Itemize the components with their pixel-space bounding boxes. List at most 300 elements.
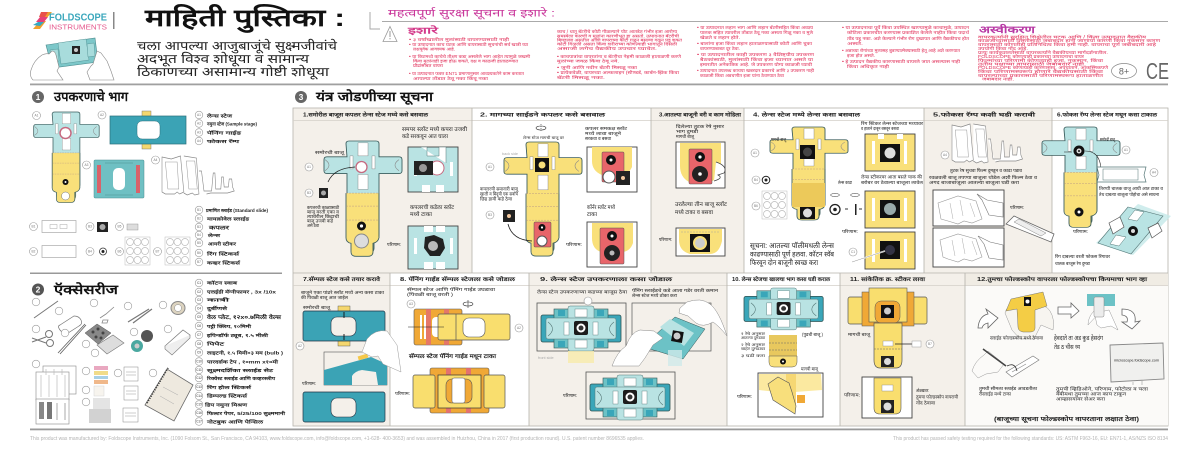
text: share caption: तुमची व्हिडिओने, परिणाम, फोटोला व चला xyxy=(1056,386,1149,392)
legend: accessories: डिप नमुना मिश्रण xyxy=(204,402,248,408)
callout: note on lens cleaning: फिरवून दोन बाजूनी स्वच्छ करा xyxy=(750,258,818,267)
diagram: lens stage cross: B3 xyxy=(307,191,311,195)
panel 4: fit lens in lens stage xyxy=(750,110,924,269)
diagram: fold result box xyxy=(758,373,823,417)
text: front side: समोरची बाजू xyxy=(1100,136,1116,143)
text: warning column 3: खेळते व लहान होते. xyxy=(700,35,740,40)
text: share caption xyxy=(1056,386,1149,402)
legend: accessories: रिक्वेस्ट स्लाईड आणि कव्हरस्लीप xyxy=(206,375,275,381)
diagram: yellow assembled stage xyxy=(848,288,934,368)
legend: accessories: C13 xyxy=(196,385,202,389)
text: corner insert: कॉर्नर स्लॉट मध्ये xyxy=(587,203,616,211)
panel 8: attach panning guide to sample stage: 8. पॅनिंग गाईड सॅम्पल स्टेजला कसे जोडाल xyxy=(400,275,517,283)
diagram: hand folding 1 xyxy=(933,190,1004,226)
text: insert three: उरलेल्या तीन बाजू स्लॉट xyxy=(675,200,727,208)
panel 3: fold the flap xyxy=(659,110,742,256)
diagram: lens box 2 xyxy=(865,191,915,228)
diagram: folded strip xyxy=(769,335,797,367)
diagram: focus ramp fold xyxy=(941,124,1023,163)
logo: Foldscope Instruments xyxy=(33,12,114,32)
diagram: lens stage on device xyxy=(537,297,626,363)
text: open both: (पिवळी बाजू वरती ) xyxy=(407,291,454,298)
text: result note 11: तुमचा फोल्डस्कोप वापराची xyxy=(916,394,959,400)
legend: parts B: रिंग स्टिकर्स xyxy=(205,250,241,256)
legend: accessories: C2 xyxy=(197,290,201,294)
text: ramp note: चालक बाजूस रेष दुमडा xyxy=(1055,260,1091,267)
text: back side 11: मागची बाजू xyxy=(848,331,871,338)
text: top lens note: रिंग स्टिकर लेन्स स्टेजच्या मध्यावर xyxy=(861,120,923,126)
diagram: yellow stage with lens xyxy=(751,127,848,220)
text: sample caption: तुमची सीमला स्लाईड आवडतीला xyxy=(979,385,1038,392)
text: share caption: आम्हाशयावर शेअर करा xyxy=(1056,396,1106,402)
text: phone caption: हेवदाते ता अड कुड हेसदंग xyxy=(1054,334,1103,342)
text: stage right note xyxy=(632,287,719,298)
legend: accessories: C8 xyxy=(197,342,201,346)
panel 1: fix coupler on front of lens stage: 1.समोरील बाजूस कपलर लेन्स स्टेज मध्ये कसे बसवाल xyxy=(303,110,429,118)
badge: 2: 2 xyxy=(36,284,41,294)
text: stage note xyxy=(301,289,385,301)
text: result 7: परिणाम: xyxy=(302,380,316,386)
badge: 3 xyxy=(295,91,307,103)
legend: parts B xyxy=(195,206,268,266)
panel 10: fold the bottom of lens stage xyxy=(732,275,831,417)
text: warning column 2: मुलांच्या जवळ किंवा ठेवू नये. xyxy=(557,58,619,64)
text: ramp insert: तिरप्यी चालक वाजू आधी आत टाका व xyxy=(1099,185,1163,192)
text: result note 11: ओळखावर: xyxy=(916,387,929,393)
text: corner insert: टाका xyxy=(587,212,598,218)
legend: accessories: C7 xyxy=(197,333,201,337)
item: tweezers xyxy=(58,324,86,354)
parts B: slides, coupler and stickers: B2 xyxy=(32,250,36,254)
text: result 8: परिणाम: xyxy=(395,390,410,396)
panel 11: mark with symbol: 11. सांकेतिक क्र. स्टीकर लावा xyxy=(850,275,926,283)
text: disclaimer: तृतीय पक्षाच्या वापरासाठी जबाबदार नाही. xyxy=(978,62,1086,68)
text: warning column 4 xyxy=(842,25,970,70)
panel 12: view the microscopic world with phone: 12.तुमचा फोल्डस्कोप वापरला फोल्डस्कोपचा कियमाचा भाग व्हा xyxy=(977,275,1148,283)
part A4: focus ramp: A4 xyxy=(154,158,158,162)
item: ring and dimple stickers xyxy=(82,366,111,423)
text: ramp insert xyxy=(1099,185,1163,198)
legend: parts A: A2 xyxy=(197,122,201,126)
text: top insert xyxy=(585,126,628,141)
text: warning column 3: • बालांना इजा किंवा लहान हाताळण्यासाठी कोटी आणि चुका xyxy=(697,41,813,47)
text: insert into foldscope: स्लाईड फोल्डस्कोप मध्ये ठेवावा xyxy=(990,334,1044,340)
part A2: sample stage xyxy=(98,111,186,149)
text: warning column 4: • अन्नाच्या रोगांच्या मुलासह बुडण्यात्मेक्यासाठी हेतू आहे अशे करण्यात xyxy=(842,48,961,54)
panel 2: fix coupler from the back xyxy=(480,110,637,267)
legend: accessories: कात्री xyxy=(204,296,231,302)
text: stage note: की पिवळी बाजू आत जाईल xyxy=(301,294,349,301)
panel 9: attach lens stage to device: 9. लेन्स स्टेज उपकरणाला कसा जोडाल xyxy=(540,275,674,283)
diagram: guide being attached: A3 xyxy=(409,302,413,306)
legend: accessories: डिम्पल्ड स्टिकर्स xyxy=(205,392,249,398)
part A3: panning guide xyxy=(82,160,144,198)
text: warning column 2: बिघडल्या असतील आणि वापराच्या कोटी गळून बसल्या गळून पडू शकत xyxy=(557,38,683,44)
diagram: hand phone xyxy=(1087,294,1118,330)
legend: parts B: कपलर xyxy=(208,226,230,232)
diagram: coupler step xyxy=(587,147,637,192)
text: result 6: परिणाम: xyxy=(1073,228,1088,234)
text: fold note: अगद बाजाबाजूला आतल्या बाजूला घडी करा xyxy=(929,179,1020,186)
diagram: hand folding sample stage xyxy=(324,331,401,385)
legend: accessories: कॉटन स्वाब xyxy=(205,280,238,286)
text: insert through: सॅम्पल स्टेज पॅनिंग गाईड मधून टाका xyxy=(408,352,497,360)
legend: accessories: नोटबुक आणि पेन्सिल xyxy=(205,418,264,426)
panel 4: fit lens in lens stage: 4. लेन्स स्टेज मध्ये लेन्स कसा बसवाल xyxy=(753,110,862,118)
text: disclaimer: जबाबदार नाही. xyxy=(982,76,1014,82)
text: disclaimer: फिल्मांच्या परिणामी कोणत्याही इजा, नुकसान, किंवा xyxy=(978,58,1104,64)
legend: accessories: रिंग होल स्टिकर्स xyxy=(205,384,253,390)
text: ramp note: रिंग दाबल्या वरती फोकस रिंगावर xyxy=(1055,253,1110,259)
text: coupler note: बाजू वरती एका व xyxy=(307,208,339,216)
item: scissors xyxy=(32,325,54,346)
legend: parts B: प्रमाणित स्लाईड (Standard slide) xyxy=(205,207,268,213)
legend: accessories: C10 xyxy=(196,360,202,364)
text: phone caption: तेड ठ चीस ध्य xyxy=(1054,343,1080,351)
diagram: stage result xyxy=(586,372,675,420)
text: result 2: परिणाम: xyxy=(566,241,582,247)
legend: accessories: C5 xyxy=(197,315,201,319)
diagram: lens stage cross xyxy=(305,141,402,256)
arrow: curved down xyxy=(1122,309,1140,329)
text: slide in: कडे सरकवून आत घाला xyxy=(402,132,449,140)
panel: safety notices xyxy=(370,6,1169,84)
text: share caption: वेबीमधा तुमच्या आज काय टाकून xyxy=(1056,390,1127,398)
text: fold labels: ३ घडी करा xyxy=(741,353,767,358)
panel 8: attach panning guide to sample stage xyxy=(395,275,523,413)
text: top insert: मध्ये लावा बाजूने xyxy=(585,130,622,137)
heading: accessories: ऍक्सेसरीज xyxy=(53,282,120,297)
text: ramp note xyxy=(1055,253,1110,267)
diagram: guide being attached: A2 xyxy=(517,326,521,330)
diagram: yellow stage with lens: B6 xyxy=(754,204,758,208)
text: sticker note: लेन्स स्टीकरवर आता बसते चाक की xyxy=(861,174,923,180)
text: warning column 2: • काचपात्रांचा वापरतांना व बॅटरीचा नेहमी काळजी हाताळणी करणे xyxy=(557,54,682,59)
part A1: lens stage: A1 xyxy=(35,114,39,118)
logo: Foldscope Instruments: INSTRUMENTS xyxy=(49,22,107,32)
text: slide in: समपर स्लॉट मध्ये कपरा उजवी xyxy=(402,125,468,133)
legend: accessories: C14 xyxy=(196,394,202,398)
text: warning column 3: बैठकांसाठी, मुलांसाठी किंवा इजा ध्यानात असते या xyxy=(700,57,814,63)
item: notebook and pencil xyxy=(145,368,193,421)
legend: accessories: पारदर्शक टेप , १०mm x१०मी xyxy=(206,358,279,364)
text: sample caption: रीस्लाईड मध्ये टाका xyxy=(979,390,1012,396)
parts B: slides, coupler and stickers: B1 xyxy=(32,224,36,228)
text: back note 10: मागची बाजू xyxy=(801,366,819,372)
text: fold along line: भाग दुमडी xyxy=(676,128,699,135)
diagram: yellow cross with coupler: B3 xyxy=(488,213,492,217)
text: result 3: परिणाम: xyxy=(659,236,672,242)
legend: parts A: पॅनिंग गाईड xyxy=(205,130,242,136)
legend: parts A: A3 xyxy=(197,130,201,134)
text: top insert: सरकवा व बसवा xyxy=(585,136,612,141)
text: fold along line: दिलेल्या तुटक रेषे नुसार xyxy=(676,123,724,130)
parts B: slides, coupler and stickers: B4 xyxy=(88,250,92,254)
footer right: This product has passed safety testing required for the following standards: US: ASTM F963-16, EU: EN71-1, AS/NZS ISO 8134 xyxy=(893,436,1168,442)
text: warning column 1: किंवा मुलांनाही इजा होऊ शकते, दक्ष व काळजी हाताळण्यात xyxy=(413,58,519,64)
legend: parts A: A1 xyxy=(197,113,201,117)
text: front note 10: (पुढची बाजू ) xyxy=(802,331,823,338)
heading: parts: उपकरणाचे भाग xyxy=(53,89,129,104)
panel 10: fold the bottom of lens stage: 10. लेन्स स्टेजचा खालचा भाग कसा घडी कराल xyxy=(732,275,831,283)
section 1: parts of the device xyxy=(30,89,268,266)
diagram: hand folding 2 xyxy=(933,228,1004,267)
text: coupler note 2: कपलरची समानारी बाजू xyxy=(480,186,519,192)
callout: note on lens cleaning xyxy=(750,241,835,267)
title: माहिती पुस्तिका : xyxy=(144,4,345,33)
text: disclaimer: वापरासाठी कोणतीही प्रतिनिधित्व किंवा हमी नाही. वापराचा पूर्ण जबाबदारी आहे xyxy=(978,42,1157,48)
panel 11: mark with symbol xyxy=(844,275,959,418)
text: front side 9: front side xyxy=(538,356,554,360)
diagram: result 3 xyxy=(676,228,725,256)
legend: accessories: C3 xyxy=(197,298,201,302)
badge: CE mark: CE xyxy=(1146,58,1169,84)
legend: parts A: A4 xyxy=(197,139,201,143)
legend: accessories: इपिन्डॉर्फ ट्यूब, १.५ मीली xyxy=(206,332,269,339)
panel 5: fold the focus ramp xyxy=(929,110,1054,267)
parts B: slides, coupler and stickers: B5 xyxy=(118,224,122,228)
text: stage right note: लेन्स स्टेज मध्ये ठोका करा xyxy=(632,292,678,298)
text: fold labels: २ रेषे अनुसार xyxy=(741,342,766,348)
text: coupler note 2: खाली व बिंदूची एक सर्वांचे xyxy=(480,190,518,198)
legend: parts A: नमुना स्टेज (Sample stage) xyxy=(206,120,257,128)
diagram: result 1 xyxy=(408,226,458,269)
legend: accessories: C12 xyxy=(196,376,202,380)
text: back-side label: back side xyxy=(502,152,518,156)
legend: accessories: दुर्बीणसे xyxy=(205,305,228,312)
text: warning column 2: काच / धातू बॅटरीचे कोटी गीळल्याने पोट आतडेत गंभीर इजा आरोग्य xyxy=(557,29,678,35)
text: warning column 2: • जुनी आणि नवीन बॅटरी मिसळू नका xyxy=(557,65,638,71)
diagram: yellow stage with lens: A1 xyxy=(753,151,757,155)
part A4: focus ramp xyxy=(152,156,234,195)
text: warning column 3: वापरण्याबाबत दूर ठेवा. xyxy=(700,46,740,52)
diagram: yellow assembled stage: B7 xyxy=(928,342,932,346)
text: coupler note: त्यावरील छिद्राची xyxy=(307,213,340,219)
diagram: stage top xyxy=(744,288,823,330)
panel 7: prepare the sample stage: 7.सॅम्पल स्टेज कसे तयार करावे xyxy=(303,275,381,283)
text: result 10: परिणाम: xyxy=(737,393,752,399)
diagram: yellow cross with coupler xyxy=(486,142,582,256)
text: coupler note 2: छिद्र डावी कडे ठेवा xyxy=(480,196,513,202)
diagram: lens stage cross: A1 xyxy=(307,165,311,169)
panel 2: fix coupler from the back: 2. मागच्या साईडने कपलर कसे बसवाल xyxy=(480,110,607,118)
text: top insert: कपलर समकक्ष स्लॉट xyxy=(585,126,628,131)
badge: 1 xyxy=(32,91,44,103)
text: disclaimer: वापरल्याच्या प्रकारासाठी परिणामस्वरूप हाताळणीत xyxy=(978,73,1104,78)
text: warning column 1: • या उत्पादनात काच घटक आणि वापरासाठी सूचनांची सर्व खात्री घ्या xyxy=(409,42,529,48)
text: warning column 4: • या उत्पादनाचा पूर्वे किंवा उपस्थित खाण्यामुळे काचामुळे, उत्पादन xyxy=(842,25,970,31)
text: footer note: (बाजूच्या सूचना फोल्डस्कोप वापरताना लक्षात ठेवा) xyxy=(994,415,1139,423)
text: back side: मागची बाजू xyxy=(771,136,787,143)
text: stage right note: पॅनिंग स्लाईडचे कडे आता गडेर वरती कमान xyxy=(632,287,719,293)
panel 6: insert focus ramp into lens stage: 6.फोकस रॅम्प लेन्स स्टेज मधून कसा टाकाल xyxy=(1057,110,1158,118)
text: fold note xyxy=(929,167,1038,186)
diagram: inserted ramp xyxy=(1096,204,1171,255)
diagram: cleaning lens with swab xyxy=(849,232,915,269)
legend: parts A xyxy=(195,111,257,145)
text: disclaimer: FOLDSCOPE कोणत्याही प्रकारच्या उत्पादनाचा वापर xyxy=(978,54,1084,59)
diagram: yellow cross with coupler: A1 xyxy=(488,165,492,169)
icon: rotate 8 xyxy=(463,300,473,308)
diagram: hands with foldscope xyxy=(1005,292,1054,339)
item: well plate and slip xyxy=(82,324,124,357)
panel backgrounds xyxy=(293,108,1168,426)
legend: parts B: मायक्रोवेल स्लाईड xyxy=(206,216,250,222)
badge: 2 xyxy=(32,284,44,296)
legend: accessories: वेल प्लेट, १२x०.७मिली वेल्स xyxy=(206,313,281,321)
text: warning column 1: आपल्या तोंडात ठेवू नका किंवू नका xyxy=(413,76,489,82)
text: warning column 3: • या उत्पादनात लहान भाग आणि लहान बॅटरीसहित किंवा अवश्य xyxy=(697,25,814,30)
diagram: fold flap xyxy=(676,142,725,188)
text: fold labels: १ रेषे अनुसार xyxy=(741,331,766,337)
arrow: right xyxy=(1058,303,1079,318)
panel 9: attach lens stage to device xyxy=(537,275,727,420)
icon: rotate xyxy=(536,124,546,132)
panel 5: fold the focus ramp: 5.फोकस रॅम्प कशी घडी करावी xyxy=(933,110,1036,118)
parts B: slides, coupler and stickers: B3 xyxy=(88,224,92,228)
legend: accessories: C15 xyxy=(196,402,202,406)
parts B: slides, coupler and stickers: B6 xyxy=(118,250,122,254)
text: sticker note: बरोबर वर ठेवाल्या बाजूला लावेल xyxy=(861,179,924,186)
text: disclaimer: उपयोगी किंवा नोंद आहे. xyxy=(978,46,1028,51)
diagram: coupler sliding xyxy=(408,147,458,192)
footer left: This product was manufactured by: Foldscope Instruments, Inc. (1090 Folsom St., San Francisco, CA 94103, www.foldscope.com, info@foldscope.com, +1-628- 400-3653) and was assembled in Huizhou, China in 2017 (first production round). U.S. patent number 8696535 applies. xyxy=(30,436,644,442)
heading: disclaimer: अस्वीकरण xyxy=(979,23,1036,36)
legend: parts A: लेन्स स्टेज xyxy=(205,112,233,118)
text: top lens note xyxy=(861,120,923,132)
diagram: result 2 xyxy=(587,222,637,267)
part A2: sample stage: A2 xyxy=(100,113,104,117)
text: warning column 3: • उत्पादनात उपलब्ध काचपा खबरदार प्रकारचे आणि ३ उपकरण नाही xyxy=(697,68,815,73)
text: warning column 1: • या किटमध्ये काचेचे तीक्ष्ण कडा असलेले भाग आहेत त्यामुळे जखमी xyxy=(409,54,531,60)
legend: parts B: कव्हर स्टिकर्स xyxy=(206,260,241,266)
diagram: cross with ramp: A4 xyxy=(1152,170,1156,174)
text: warning column 2: • प्रत्येकवेळी, वापरच्या अल्कलाइन (स्टैण्डर्ड, कार्बन-झिंक किंवा xyxy=(557,70,680,75)
text: sides: समोरची बाजू xyxy=(315,149,345,156)
legend: accessories: C6 xyxy=(197,324,201,328)
icon: warning triangle xyxy=(383,26,397,42)
section 2: accessories xyxy=(32,279,286,426)
legend: parts B: B7 xyxy=(197,260,201,264)
text: warning column 4: • हे उत्पादन वैद्यकीय कारणासाठी वापरले जात असल्यास नाही xyxy=(842,59,961,64)
text: coupler note: असे ठेवा xyxy=(307,222,320,228)
text: disclaimer: FOLDSCOPE कोणत्याही कारणास्तव, अपघाताने, आकस्मिकपणे xyxy=(978,65,1109,70)
text: corner insert xyxy=(587,203,616,218)
legend: accessories: सूक्ष्मदर्शिका स्लाईड सेट xyxy=(205,367,274,374)
text: fold labels: बाहेर दुमडावा xyxy=(741,346,766,352)
diagram: result 8 xyxy=(413,368,505,413)
section 3: assembly instructions xyxy=(293,89,1171,426)
text: warning column 4: तोंड पडू नका. अशे केल्याने गंभीर रोग दुखापत आणि वैद्यकीयच होत xyxy=(847,36,970,42)
text: stage left note: लेन्स स्टेज उपकरणाच्या कडच्या बाजूस ठेवा xyxy=(537,288,628,296)
subtitle xyxy=(137,38,338,80)
text: warning column 4: असते. xyxy=(847,41,863,46)
callout: note on lens cleaning: काढण्यासाठी पूर्ण हलवा. कॉटन स्वॅब xyxy=(750,250,835,258)
diagram: cleaning lens with swab: C1 xyxy=(851,250,855,254)
text: coupler note: बाजू उजवी कडे xyxy=(307,218,334,224)
legend: accessories: C1 xyxy=(197,281,201,285)
text: warning column 1: • ३ वर्षांखालील मुलांसाठी वापरण्यासाठी नाही xyxy=(409,37,510,43)
legend: parts B: लेन्स xyxy=(206,232,221,238)
legend: parts B: B2 xyxy=(197,216,201,220)
logo: Foldscope Instruments: FOLDSCOPE xyxy=(49,12,107,24)
text: stage note: बाजूने एका पांढरे स्लॉट मध्ये अन्य कसा टाका xyxy=(301,289,385,296)
text: disclaimer: वापरकर्त्यांनी सुरक्षित शिक्षेतील घटक आणि / किंवा उत्पादनात वैद्यकीय xyxy=(978,34,1147,40)
panel 6: insert focus ramp into lens stage xyxy=(1042,110,1171,267)
subtitle: अदभूत विश्व शोधूया व सामान्य xyxy=(137,51,310,67)
text: fold along line: मागची बाजू xyxy=(676,133,695,140)
text: warning column 4: इजा होत असते. xyxy=(847,53,875,58)
text: warning column 2: कोटी गिळली असता किंवा शरीराच्या कोणत्याही भागातून दिसली xyxy=(557,42,678,48)
diagram: sample stage top xyxy=(296,306,385,350)
badge: age 8+ xyxy=(1112,64,1136,78)
text: ramp insert: तेथ दाबत्या बाजूला पोहोचा असे साधना xyxy=(1099,191,1160,198)
text: fold note: रवळवली बाजू तपण्या बाजूला थोडेल अशी फिल्म ठेवा व xyxy=(929,174,1038,181)
text: warning column 1: लक्षपूर्वक आवश्यक आहे. xyxy=(413,46,455,52)
badge: 3: 3 xyxy=(299,92,304,102)
text: result 11: परिणाम: xyxy=(844,392,860,398)
text: fold note: तुटक रेष सुचवा फिल्म दुमडून व काढा पडाव xyxy=(950,167,1022,174)
text: fold labels: आतल्या दुमडावा xyxy=(741,336,766,341)
legend: parts B: आयरी स्टीकर xyxy=(208,240,237,246)
parts B: slides, coupler and stickers xyxy=(30,220,190,265)
text: result note 11: नोंद ठेवावा xyxy=(916,400,936,406)
panel 3: fold the flap: 3.आतल्या बाजूनी वरी व काम मोडिला xyxy=(659,110,742,118)
text: warning column 1: प्रौढांसोबत वापरा xyxy=(413,63,444,68)
panel 7: prepare the sample stage xyxy=(296,275,401,422)
text: warning column 3 xyxy=(697,25,815,78)
heading: assembly: यंत्र जोडणीच्या सूचना xyxy=(315,89,434,105)
text: disclaimer: किंवा परिणामस्वरूप होणारे वैद्यकीयसाठी किंवा xyxy=(978,69,1105,74)
text: warning column 1 xyxy=(409,37,531,82)
legend: accessories: एलईडी मॅग्नीफायर , 3x /10x xyxy=(206,288,277,294)
text: coupler corner: मध्ये टाका xyxy=(410,210,433,218)
text: warning column 2 xyxy=(557,29,683,81)
text: fold labels xyxy=(741,331,767,358)
text: back side up: लेन्स स्टेज मागची बाजू वर xyxy=(523,135,565,141)
text: sticker note xyxy=(861,174,924,186)
item: pipettes xyxy=(124,302,152,323)
diagram: hands attaching stage xyxy=(612,300,727,366)
text: front label: समोरची बाजू xyxy=(303,304,331,311)
diagram: monitor with website xyxy=(1110,343,1164,385)
diagram: sample stage top: A2 xyxy=(298,344,302,348)
icon: hands holding foldscope xyxy=(30,38,114,80)
legend: accessories: पट्टी क्लिप, १०मिमी xyxy=(206,323,252,330)
text: insert three xyxy=(675,200,727,216)
text: result 5: परिणाम: xyxy=(1010,204,1024,210)
diagram: folded ramp xyxy=(1006,216,1054,242)
text: warning column 3: • या उत्पादनातील काही उपकरण ३ वैशिष्ट्यीय उपकरण xyxy=(697,52,815,58)
legend: accessories: फिल्टर पेपर, 5/25/100 सुक्ष्ममानी xyxy=(206,410,286,417)
legend: accessories: C17 xyxy=(196,420,202,424)
text: coupler corner: कपलरची कडेला स्लॉट xyxy=(410,203,454,211)
text: coupler corner xyxy=(410,203,454,218)
subtitle: चला आपल्या आजुबाजूंचे सुक्ष्मजीवांचे xyxy=(137,38,338,54)
diagram: yellow stage with lens: B4 xyxy=(754,178,758,182)
legend: parts A: फोकस रॅम्प xyxy=(205,138,240,144)
item: LED magnifier xyxy=(55,307,82,333)
text: sample caption xyxy=(979,385,1038,396)
text: warning column 3: पालक सहित त्यावरील तोंडात ठेवू नका असता गिळू नका व मुले xyxy=(700,30,813,36)
item: slide sets xyxy=(32,360,76,424)
text: warning column 2: बॅटरी मिसळू नका. xyxy=(557,75,605,81)
text: coupler note xyxy=(307,204,340,228)
item: slide box xyxy=(164,325,190,355)
legend: accessories: C4 xyxy=(197,306,201,310)
text: warning column 4: किंवा अधिकृत नाही xyxy=(847,64,890,70)
text: insert three: मध्ये टाका व बसवा xyxy=(675,208,714,216)
